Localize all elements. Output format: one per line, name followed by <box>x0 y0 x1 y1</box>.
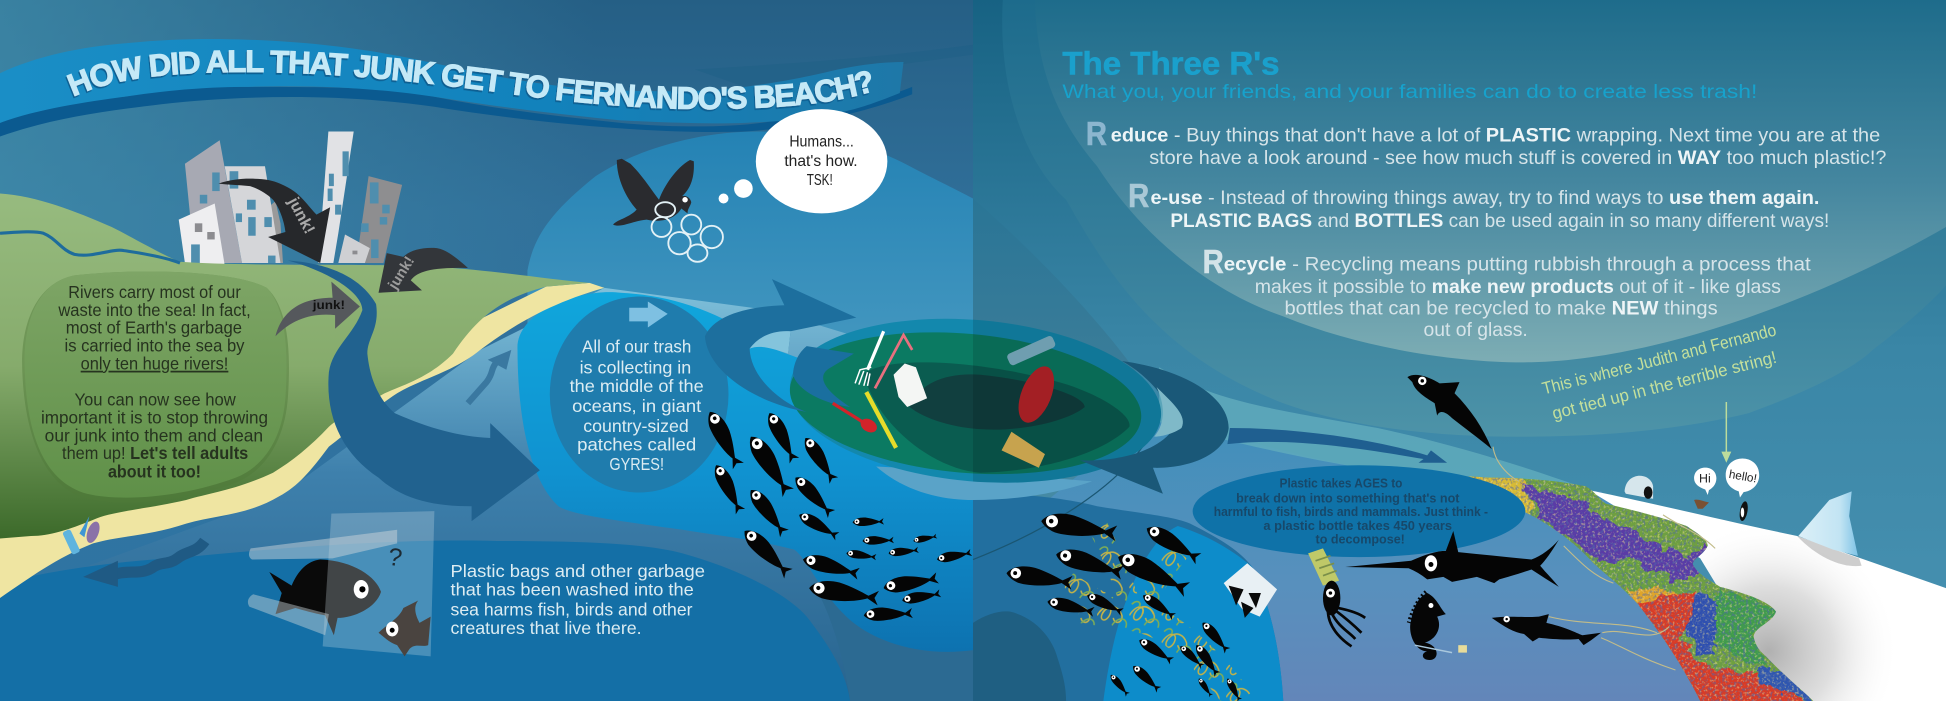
thought bubble <box>719 109 887 213</box>
right page outer ellipse band <box>1002 0 1946 437</box>
tangled net of string <box>1468 476 1813 701</box>
bright arch <box>1103 526 1283 701</box>
wavy current arrow: out to sea <box>83 541 205 587</box>
green text panel: our junk into them and clean <box>45 426 263 446</box>
block: Re-use: e-use - Instead of throwing things away, try to find ways to use them again. <box>1150 188 1819 209</box>
green text panel <box>22 271 289 503</box>
green text panel: Rivers carry most of our <box>68 282 241 302</box>
bird circle <box>527 132 973 561</box>
green text panel: about it too! <box>108 462 201 482</box>
bag text: Plastic bags and other garbage <box>451 561 705 581</box>
block: Recycle: makes it possible to make new products out of it - like glass <box>1255 277 1781 298</box>
arrow: junk to river <box>379 248 468 293</box>
seahorse <box>1409 592 1467 660</box>
main river and big arrow <box>288 261 540 521</box>
dark cave <box>973 611 1066 701</box>
gyre circle with text: country-sized <box>583 416 689 436</box>
green text panel: most of Earth's garbage <box>66 318 242 338</box>
pale crescent under gyre <box>876 467 1092 500</box>
green text panel: is carried into the sea by <box>65 336 245 356</box>
iceberg <box>1798 491 1858 556</box>
green text panel: them up! Let's tell adults <box>62 443 248 463</box>
callout: plastic takes ages: Plastic takes AGES to <box>1280 476 1402 491</box>
gyre circle with text: All of our trash <box>582 336 691 356</box>
swirl arrow: gyre right <box>1080 361 1229 494</box>
block: Reduce <box>1086 116 1886 169</box>
block: Reduce: educe - Buy things that don't have a lot of PLASTIC wrapping. Next time you are at the <box>1111 125 1880 146</box>
bag text: that has been washed into the <box>451 580 694 600</box>
speech bubble: hello <box>1726 458 1759 498</box>
arrow: junk into river <box>276 282 360 336</box>
lower right sea <box>973 409 1837 701</box>
thin gyre boundary line <box>973 417 1159 560</box>
callout: plastic takes ages: a plastic bottle takes 450 years <box>1263 518 1452 533</box>
bag text: sea harms fish, birds and other <box>451 599 693 619</box>
block: Recycle: out of glass. <box>1424 320 1528 341</box>
thought bubble: TSK! <box>807 171 833 189</box>
plastic bag with trapped fish <box>248 511 434 656</box>
pointer arrow <box>1721 402 1731 463</box>
chicken <box>1694 500 1709 509</box>
callout: plastic takes ages <box>1193 465 1525 557</box>
callout: plastic takes ages: to decompose! <box>1316 531 1405 546</box>
shark <box>1492 614 1601 645</box>
string on fish tails <box>1067 527 1179 614</box>
beach litter <box>62 516 102 555</box>
speech bubble: Hi: Hi <box>1699 472 1711 486</box>
block: Recycle: bottles that can be recycled to make NEW things <box>1285 299 1718 320</box>
label: Judith and Fernando: This is where Judith and Fernando <box>1540 320 1778 398</box>
sea on left page <box>0 288 973 701</box>
callout: plastic takes ages: harmful to fish, birds and mammals. Just think - <box>1214 504 1488 519</box>
current arrow toward net <box>1227 428 1447 463</box>
title: HOW DID ALL THAT JUNK GET TO FERNANDO'S BEACH? <box>66 50 872 112</box>
title ribbon <box>0 39 973 136</box>
penguin <box>1738 501 1749 522</box>
callout: plastic takes ages: break down into something that's not <box>1236 490 1460 505</box>
green text panel: waste into the sea! In fact, <box>57 300 251 320</box>
hill <box>0 194 590 538</box>
thought bubble: Humans... <box>789 132 854 150</box>
tangled string around fish <box>1080 608 1239 701</box>
block: Re-use: PLASTIC BAGS and BOTTLES can be used again in so many different ways! <box>1170 211 1829 232</box>
gyre circle with text: GYRES! <box>609 454 664 474</box>
background: right page <box>973 0 1946 701</box>
marlin <box>1345 531 1559 587</box>
gyre circle with text: oceans, in giant <box>572 396 701 416</box>
gyre circle with text: is collecting in <box>580 357 691 377</box>
heading: The Three R's: The Three R's <box>1062 45 1280 81</box>
school of tangled fish: right <box>1005 510 1243 701</box>
block: Recycle <box>1203 244 1811 341</box>
stray strings <box>1493 447 1715 670</box>
thought bubble: that's how. <box>784 152 858 170</box>
gyre circle with text: the middle of the <box>570 376 704 396</box>
gyre circle with text: patches called <box>577 434 696 454</box>
school of fish: left <box>703 408 972 622</box>
city buildings <box>179 132 402 265</box>
bag text <box>451 561 705 638</box>
dolphin <box>1407 375 1492 449</box>
squid with cup <box>1308 548 1365 646</box>
green text panel: important it is to stop throwing <box>41 408 268 428</box>
fish in plastic bag <box>1224 563 1277 618</box>
bright gyre water <box>517 292 973 652</box>
bag text: creatures that live there. <box>451 618 642 638</box>
block: Recycle: ecycle - Recycling means putting rubbish through a process that <box>1224 254 1811 275</box>
green text panel: only ten huge rivers! <box>81 354 228 374</box>
wavy current arrow: upward <box>468 350 511 403</box>
swirl arrow: gyre left <box>705 279 856 412</box>
bird with six-pack rings <box>613 159 723 262</box>
igloo <box>1625 476 1653 499</box>
lower blue basin <box>0 540 850 701</box>
thin tributary river <box>0 232 180 263</box>
speech bubble: Hi <box>1694 468 1716 495</box>
bird circle: right page part <box>973 199 1155 561</box>
beach <box>0 283 604 598</box>
arrow: junk into river: junk! <box>312 298 345 312</box>
plastic bag with trapped fish: ? <box>386 544 404 572</box>
block: Recycle: R <box>1203 244 1224 281</box>
gyre ellipses <box>790 318 1162 483</box>
block: Re-use: R <box>1128 178 1149 215</box>
green text panel: You can now see how <box>74 390 236 410</box>
gyre circle with text <box>550 297 729 493</box>
gyre litter <box>833 331 1061 468</box>
block: Reduce: store have a look around - see how much stuff is covered in WAY too much plastic!? <box>1149 148 1886 169</box>
right page inner ellipse <box>1035 0 1946 362</box>
light teal shoreline wedge <box>1159 367 1601 494</box>
background: left page <box>0 0 974 701</box>
arrow: junk from city <box>218 179 330 263</box>
block: Re-use <box>1128 178 1829 232</box>
arrow: junk to river: junk! <box>385 254 418 293</box>
right page arch of water <box>973 495 1283 701</box>
subheading: What you, your friends, and your families can do to create less trash! <box>1062 81 1757 103</box>
arrow: junk from city: junk! <box>284 194 318 237</box>
speech bubble: hello: hello! <box>1728 468 1758 486</box>
label: Judith and Fernando: got tied up in the terrible string! <box>1550 347 1778 423</box>
ice shelf <box>1589 490 1946 701</box>
block: Reduce: R <box>1086 116 1107 153</box>
dark bottom strip <box>813 583 973 701</box>
